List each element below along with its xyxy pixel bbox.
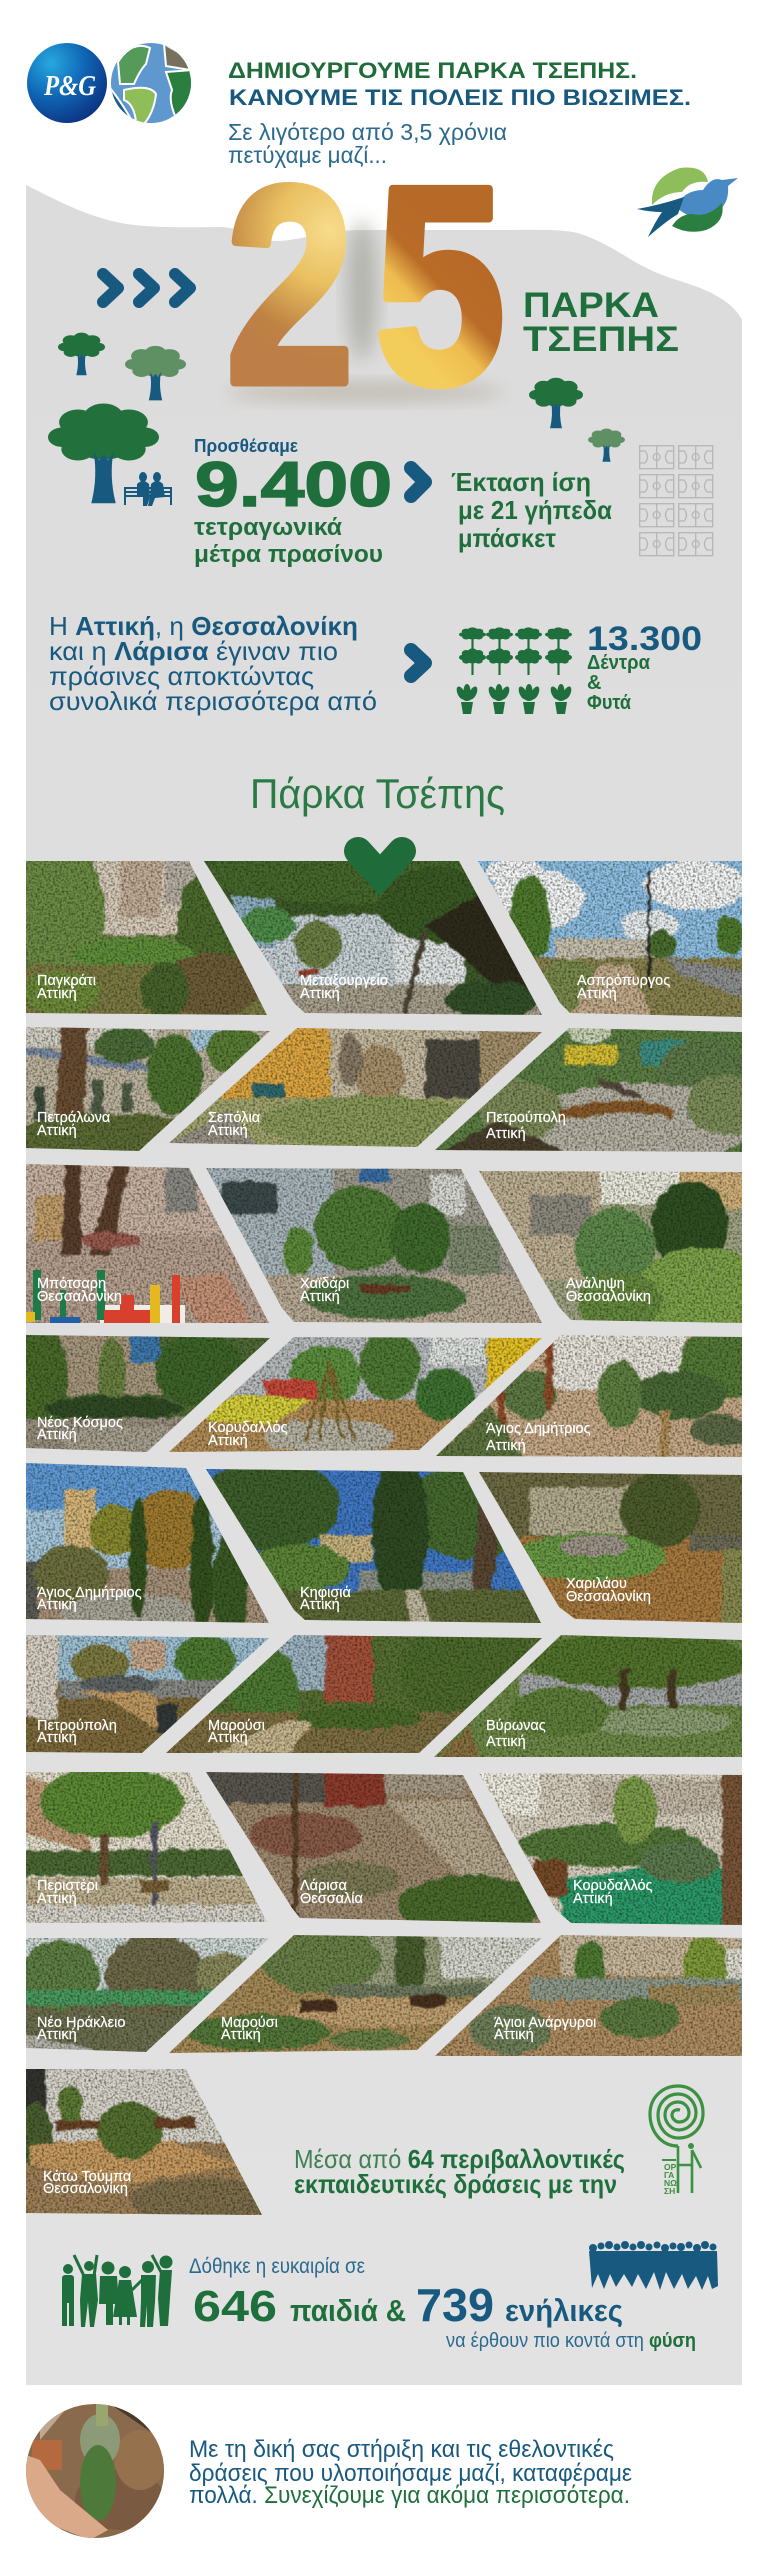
arrow: chevron to court area <box>411 468 425 496</box>
photo: Ασπρόπυργος <box>478 861 742 1017</box>
photo: Χαϊδάρι <box>206 1168 542 1323</box>
stat: 9.400: τετραγωνικά <box>194 514 342 541</box>
label: Αττική <box>37 2027 77 2043</box>
text: closing message: Με τη δική σας στήριξη και τις εθελοντικές <box>189 2436 614 2463</box>
icon: light tree <box>125 346 186 400</box>
icon: basketball courts <box>640 446 713 556</box>
photo: Άγιος Δημήτριος 2 <box>26 1463 269 1623</box>
text: area equal to 21 courts: με 21 γήπεδα <box>458 495 612 525</box>
label: Αττική <box>37 1730 77 1746</box>
label: Αττική <box>208 1730 248 1746</box>
text: closing message: πολλά. Συνεχίζουμε για ακόμα περισσότερα. <box>189 2482 630 2509</box>
label: Θεσσαλονίκη <box>566 1589 651 1605</box>
label: Μπότσαρη <box>37 1276 106 1292</box>
stat: 646 children: παιδιά & <box>290 2293 406 2328</box>
label: Κορυδαλλός <box>208 1420 288 1436</box>
stat: 739 adults: 739 <box>416 2279 494 2331</box>
big number 25: 2 <box>226 130 354 442</box>
text: regions paragraph: Η Αττική, η Θεσσαλονίκη <box>49 611 358 641</box>
label: Αττική <box>300 1597 340 1613</box>
heading: 25 parks label: ΤΣΕΠΗΣ <box>523 320 679 359</box>
text: educational actions <box>294 2144 625 2199</box>
subtitle: πετύχαμε μαζί... <box>228 142 387 168</box>
logo: Οργάνωση: ΣΗ <box>664 2186 675 2196</box>
label: Πετρούπολη <box>37 1718 117 1734</box>
stat: 9.400: 9.400 <box>195 450 392 520</box>
label: Μαρούσι <box>221 2015 278 2031</box>
photo: Ανάληψη <box>479 1171 742 1323</box>
photo: Μπότσαρη <box>26 1164 269 1323</box>
label: Κορυδαλλός <box>573 1878 653 1894</box>
label: Σεπόλια <box>208 1110 260 1126</box>
logo: Οργάνωση: ΓΑ <box>664 2170 674 2180</box>
photo: Μεταξουργείο <box>204 861 542 1015</box>
title: ΚΑΝΟΥΜΕ ΤΙΣ ΠΟΛΕΙΣ ΠΙΟ ΒΙΩΣΙΜΕΣ. <box>229 85 691 110</box>
text: area equal to 21 courts: Έκταση ίση <box>451 467 591 497</box>
photo: Μαρούσι <box>166 1635 542 1753</box>
arrow: chevron to trees <box>411 650 425 676</box>
icon: tree and plant grid <box>455 627 573 714</box>
text: area equal to 21 courts <box>451 467 612 553</box>
label: Αττική <box>494 2027 534 2043</box>
icon: children silhouettes <box>62 2255 172 2327</box>
label: Μαρούσι <box>208 1718 265 1734</box>
label: Χαϊδάρι <box>300 1276 349 1292</box>
big number 25: 5 <box>375 130 505 442</box>
label: Αττική <box>208 1123 248 1139</box>
heading: pocket parks: Πάρκα Τσέπης <box>250 770 505 817</box>
text: educational actions: εκπαιδευτικές δράσεις με την <box>294 2169 617 2199</box>
stat: 13.300: 13.300 <box>587 620 702 658</box>
label: Λάρισα <box>300 1878 347 1894</box>
logo: P&G <box>27 43 107 123</box>
label: Θεσσαλονίκη <box>37 1289 122 1305</box>
icon: bench with people <box>124 472 172 506</box>
photo: Πετράλωνα <box>26 1027 270 1151</box>
photo: Νέος Κόσμος <box>26 1335 270 1452</box>
icon: three chevrons <box>103 274 190 302</box>
photo: Κάτω Τούμπα <box>26 2069 262 2215</box>
label: Άγιοι Ανάργυροι <box>494 2015 596 2031</box>
label: Νέος Κόσμος <box>37 1415 123 1431</box>
label: Κηφισιά <box>300 1585 351 1601</box>
stat: 9.400 <box>194 435 392 568</box>
photo: Πετρούπολη 2 <box>26 1635 269 1753</box>
label: Αττική <box>37 986 77 1002</box>
label: Αττική <box>208 1433 248 1449</box>
label: Ασπρόπυργος <box>577 973 670 989</box>
text: area equal to 21 courts: μπάσκετ <box>458 523 556 553</box>
title <box>228 58 691 110</box>
text: closer to nature: να έρθουν πιο κοντά στη φύση <box>446 2330 696 2352</box>
icon: adults crowd <box>589 2241 718 2290</box>
stat: 13.300: Φυτά <box>587 692 632 714</box>
label: Πετράλωνα <box>37 1110 110 1126</box>
text: regions paragraph <box>49 611 377 716</box>
logo: globe <box>110 42 192 124</box>
stat: 13.300: & <box>587 672 601 694</box>
photo: Περιστέρι <box>26 1772 267 1923</box>
photo: Πετρούπολη <box>435 1028 742 1152</box>
stat: 9.400: Προσθέσαμε <box>194 435 298 456</box>
icon: small tree <box>58 333 105 375</box>
text: regions paragraph: και η Λάρισα έγιναν πιο <box>49 636 338 666</box>
label: Αττική <box>577 986 617 1002</box>
label: Αττική <box>486 1438 526 1454</box>
text: regions paragraph: πράσινες αποκτώντας <box>49 661 314 691</box>
text: opportunity intro: Δόθηκε η ευκαιρία σε <box>189 2255 365 2278</box>
subtitle <box>228 119 507 168</box>
photo: Παγκράτι <box>26 861 267 1015</box>
stat: 13.300 <box>587 620 702 714</box>
photo: Κηφισιά <box>206 1469 541 1623</box>
label: Ανάληψη <box>566 1276 625 1292</box>
label: Θεσσαλία <box>300 1891 363 1907</box>
text: educational actions: Μέσα από 64 περιβαλλοντικές <box>294 2144 625 2174</box>
icon: bird logo <box>637 168 738 237</box>
title: ΔΗΜΙΟΥΡΓΟΥΜΕ ΠΑΡΚΑ ΤΣΕΠΗΣ. <box>228 58 637 83</box>
stat: 646 children: 646 <box>193 2282 277 2331</box>
label: Άγιος Δημήτριος <box>486 1421 591 1437</box>
heading: 25 parks label: ΠΑΡΚΑ <box>523 286 659 325</box>
stat: 9.400: μέτρα πρασίνου <box>194 541 383 568</box>
photo: Άγιος Δημήτριος <box>436 1335 742 1457</box>
stat: 13.300: Δέντρα <box>587 652 651 674</box>
label: Αττική <box>37 1123 77 1139</box>
label: Αττική <box>573 1891 613 1907</box>
label: Αττική <box>300 986 340 1002</box>
label: Αττική <box>221 2027 261 2043</box>
subtitle: Σε λιγότερο από 3,5 χρόνια <box>228 119 507 145</box>
label: Βύρωνας <box>486 1718 546 1734</box>
text: regions paragraph: συνολικά περισσότερα από <box>49 686 377 716</box>
logo: Οργάνωση: ΟΡ <box>664 2162 677 2172</box>
label: Αττική <box>486 1734 526 1750</box>
label: Αττική <box>486 1126 526 1142</box>
icon: big tree <box>48 404 159 503</box>
label: Χαριλάου <box>566 1576 627 1592</box>
label: Μεταξουργείο <box>300 973 388 989</box>
heading: 25 parks label <box>523 286 679 359</box>
label: Αττική <box>300 1289 340 1305</box>
photo: Λάρισα <box>206 1772 541 1923</box>
logo: Οργάνωση: ΝΩ <box>664 2178 677 2188</box>
label: Θεσσαλονίκη <box>566 1289 651 1305</box>
icon: right light tree <box>588 428 625 462</box>
label: Περιστέρι <box>37 1878 98 1894</box>
photo: planting hands <box>26 2404 164 2538</box>
photo: Βύρωνας <box>434 1635 742 1757</box>
label: Παγκράτι <box>37 973 96 989</box>
label: Αττική <box>37 1597 77 1613</box>
label: Πετρούπολη <box>486 1110 566 1126</box>
logo: P&G: P&G <box>43 71 96 102</box>
arrow: green chevron <box>358 851 402 875</box>
big number 25 <box>225 130 505 442</box>
label: Άγιος Δημήτριος <box>37 1585 142 1601</box>
label: Αττική <box>37 1427 77 1443</box>
photo: Άγιοι Ανάργυροι <box>435 1935 742 2056</box>
stat: 739 adults <box>416 2279 623 2331</box>
label: Θεσσαλονίκη <box>43 2181 128 2197</box>
photo: Κορυδαλλός <box>169 1337 542 1452</box>
label: Κάτω Τούμπα <box>43 2169 131 2185</box>
icon: right tree <box>529 378 583 428</box>
photo: Μαρούσι 2 <box>169 1935 542 2053</box>
logo: Οργάνωση <box>650 2086 703 2196</box>
photo: Χαριλάου <box>479 1472 742 1623</box>
label: Νέο Ηράκλειο <box>37 2015 125 2031</box>
text: closing message: δράσεις που υλοποιήσαμε μαζί, καταφέραμε <box>189 2460 632 2487</box>
label: Αττική <box>37 1891 77 1907</box>
photo: Σεπόλια <box>169 1028 542 1147</box>
photo: Νέο Ηράκλειο <box>26 1938 269 2052</box>
stat: 646 children <box>193 2282 406 2331</box>
stat: 739 adults: ενήλικες <box>505 2293 623 2328</box>
text: closing message <box>189 2436 632 2509</box>
photo: Κορυδαλλός 2 <box>479 1773 742 1925</box>
